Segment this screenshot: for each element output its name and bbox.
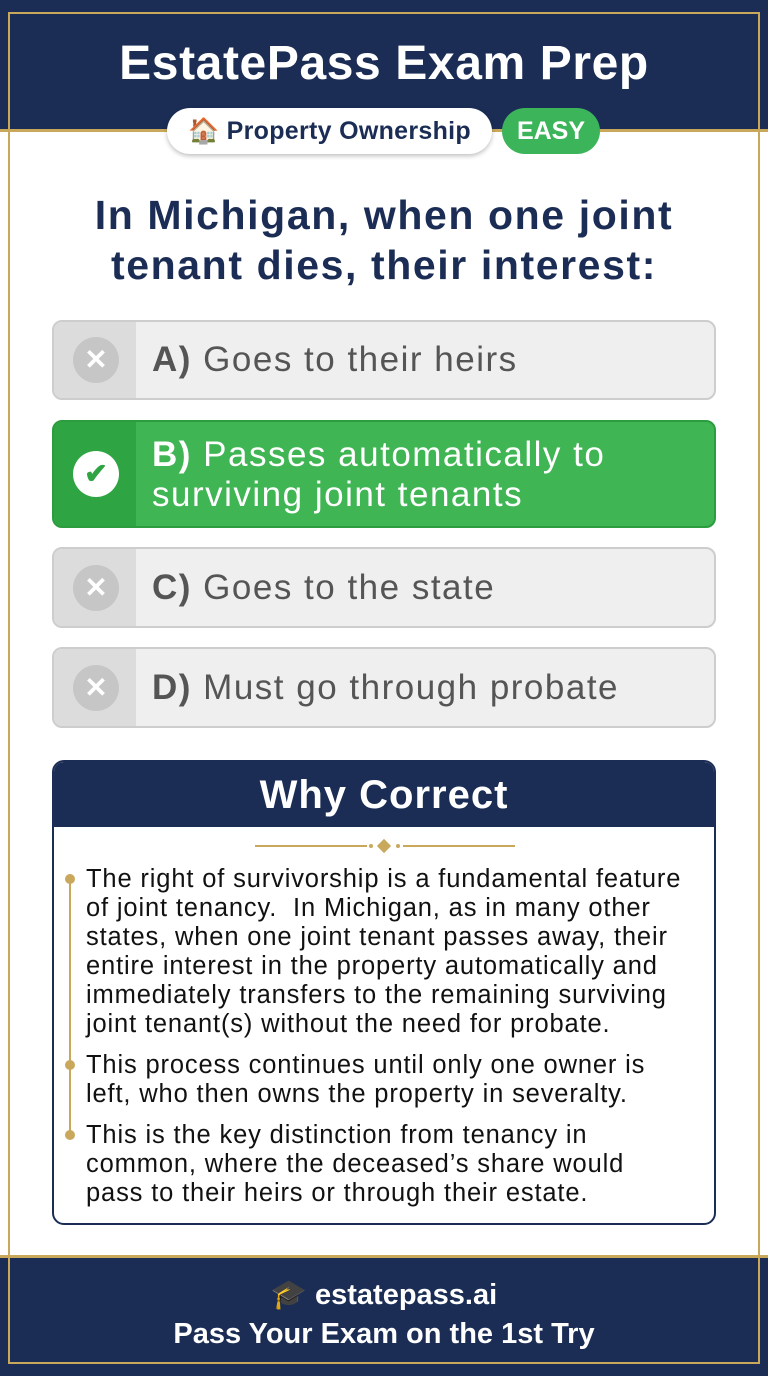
- bullet 1: The right of survivorship is a fundamental feature: [86, 865, 681, 893]
- option D: D) Must go through probate: [152, 668, 619, 707]
- footer brand: 🎓 estatepass.ai: [271, 1279, 497, 1311]
- bullet 1: entire interest in the property automatically and: [86, 952, 658, 980]
- option C: C) Goes to the state: [152, 568, 495, 607]
- panel: why correct: [52, 760, 716, 1225]
- bullet 1: immediately transfers to the remaining surviving: [86, 981, 667, 1009]
- option B (correct): B) Passes automatically to: [152, 435, 605, 474]
- bullet 3: [86, 1121, 624, 1207]
- bullet 1: of joint tenancy. In Michigan, as in many other: [86, 894, 651, 922]
- panel heading: Why Correct: [260, 773, 508, 817]
- option A: [52, 320, 716, 400]
- option D: ✕: [84, 672, 108, 703]
- bullet 2: This process continues until only one owner is: [86, 1051, 645, 1079]
- option B (correct): ✔: [84, 458, 108, 489]
- difficulty pill: EASY: [517, 117, 585, 145]
- ornament divider: [255, 839, 515, 853]
- option C: ✕: [84, 572, 108, 603]
- bullet 3: common, where the deceased’s share would: [86, 1150, 624, 1178]
- option D: [52, 647, 716, 728]
- question: In Michigan, when one joint: [95, 192, 673, 238]
- category pill: 🏠 Property Ownership: [188, 117, 471, 145]
- bullet timeline: [65, 874, 75, 1140]
- option A: A) Goes to their heirs: [152, 340, 518, 379]
- bullet 1: states, when one joint tenant passes away, their: [86, 923, 668, 951]
- bullet 3: pass to their heirs or through their estate.: [86, 1179, 588, 1207]
- question: [95, 192, 673, 288]
- bullet 2: [86, 1051, 645, 1108]
- header band: [0, 0, 768, 132]
- option B (correct): surviving joint tenants: [152, 475, 523, 514]
- option A: ✕: [84, 344, 108, 375]
- bullet 2: left, who then owns the property in severalty.: [86, 1080, 628, 1108]
- footer band: [0, 1258, 768, 1376]
- bullet 1: joint tenant(s) without the need for probate.: [86, 1010, 610, 1038]
- bullet 1: [85, 865, 681, 1038]
- footer tagline: Pass Your Exam on the 1st Try: [173, 1318, 595, 1350]
- option B (correct): [52, 420, 716, 528]
- option C: [52, 547, 716, 628]
- bullet 3: This is the key distinction from tenancy in: [86, 1121, 587, 1149]
- difficulty pill: [502, 108, 600, 154]
- question: tenant dies, their interest:: [111, 242, 657, 288]
- panel heading: [54, 762, 714, 827]
- title: EstatePass Exam Prep: [119, 37, 649, 90]
- category pill: [167, 108, 492, 154]
